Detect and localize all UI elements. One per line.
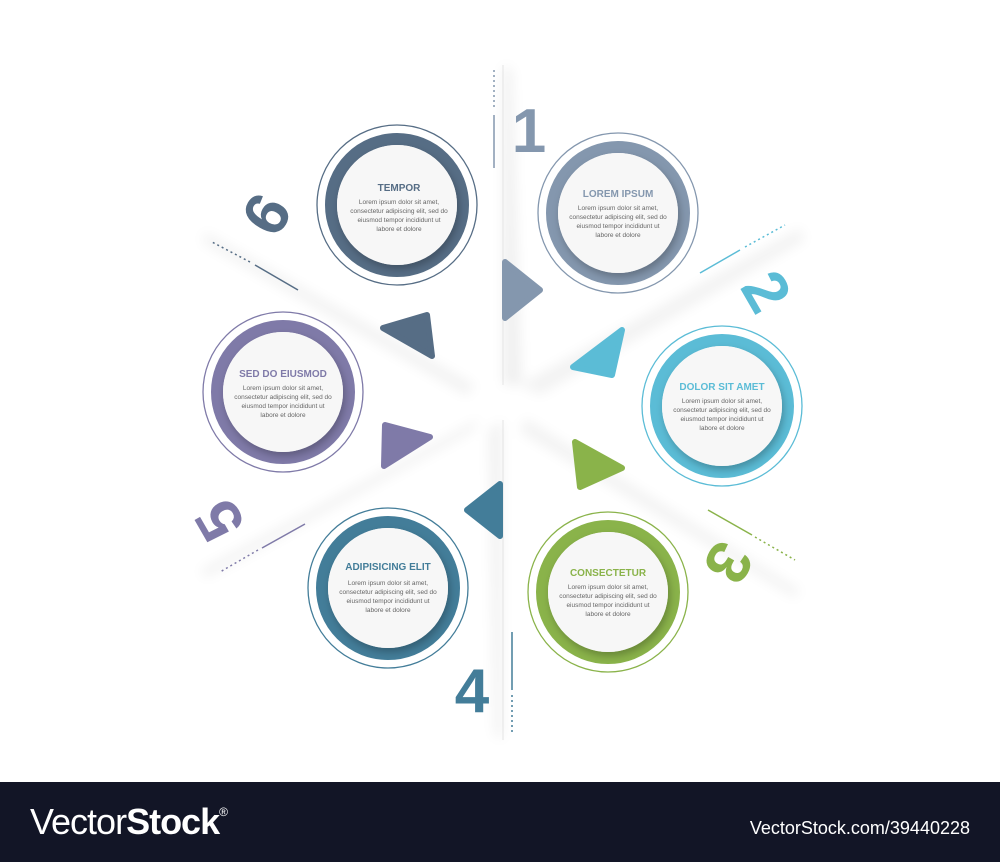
circle 5: eiusmod tempor incididunt ut <box>241 403 325 410</box>
circle 2: eiusmod tempor incididunt ut <box>680 416 764 423</box>
circle 1 <box>538 133 698 293</box>
footer bar: ® <box>219 805 228 819</box>
circle 5 <box>203 312 363 472</box>
circle 1: consectetur adipiscing elit, sed do <box>569 214 667 221</box>
circle 5: consectetur adipiscing elit, sed do <box>234 394 332 401</box>
circle 2: DOLOR SIT AMET <box>679 382 765 393</box>
circle 3: CONSECTETUR <box>570 568 647 579</box>
circle 3: consectetur adipiscing elit, sed do <box>559 593 657 600</box>
numbers <box>182 97 804 726</box>
circle 4: eiusmod tempor incididunt ut <box>346 598 430 605</box>
circle 6: Lorem ipsum dolor sit amet, <box>359 199 439 206</box>
circle 5: Lorem ipsum dolor sit amet, <box>243 385 323 392</box>
footer bar: VectorStock <box>30 801 219 842</box>
circle 4: labore et dolore <box>365 607 411 614</box>
numbers: 5 <box>182 488 259 552</box>
footer bar <box>0 782 1000 862</box>
circle 1: labore et dolore <box>595 232 641 239</box>
numbers: 4 <box>455 657 490 726</box>
circle 2: Lorem ipsum dolor sit amet, <box>682 398 762 405</box>
circle 1: Lorem ipsum dolor sit amet, <box>578 205 658 212</box>
circle 6: labore et dolore <box>376 226 422 233</box>
circle 3: labore et dolore <box>585 611 631 618</box>
circle 2: labore et dolore <box>699 425 745 432</box>
circle 2: consectetur adipiscing elit, sed do <box>673 407 771 414</box>
numbers: 2 <box>727 260 804 324</box>
numbers: 1 <box>512 97 546 166</box>
circle 4 <box>308 508 468 668</box>
numbers: 3 <box>689 530 766 594</box>
circle 6: TEMPOR <box>378 183 421 194</box>
circle 4: ADIPISICING ELIT <box>345 562 431 573</box>
circle 6: eiusmod tempor incididunt ut <box>357 217 441 224</box>
circle 5: labore et dolore <box>260 412 306 419</box>
triangles <box>383 262 622 536</box>
circle 2 <box>642 326 802 486</box>
circle 3 <box>528 512 688 672</box>
numbers: 6 <box>229 183 306 247</box>
circle 6 <box>317 125 477 285</box>
circle 6: consectetur adipiscing elit, sed do <box>350 208 448 215</box>
circle 1: eiusmod tempor incididunt ut <box>576 223 660 230</box>
circle 3: eiusmod tempor incididunt ut <box>566 602 650 609</box>
circle 4: consectetur adipiscing elit, sed do <box>339 589 437 596</box>
footer bar: VectorStock.com/39440228 <box>750 818 970 838</box>
dashed markers <box>212 70 795 735</box>
circle 4: Lorem ipsum dolor sit amet, <box>348 580 428 587</box>
blade shadows <box>200 65 805 740</box>
circle 1: LOREM IPSUM <box>583 189 653 200</box>
circle 3: Lorem ipsum dolor sit amet, <box>568 584 648 591</box>
circle 5: SED DO EIUSMOD <box>239 369 327 380</box>
